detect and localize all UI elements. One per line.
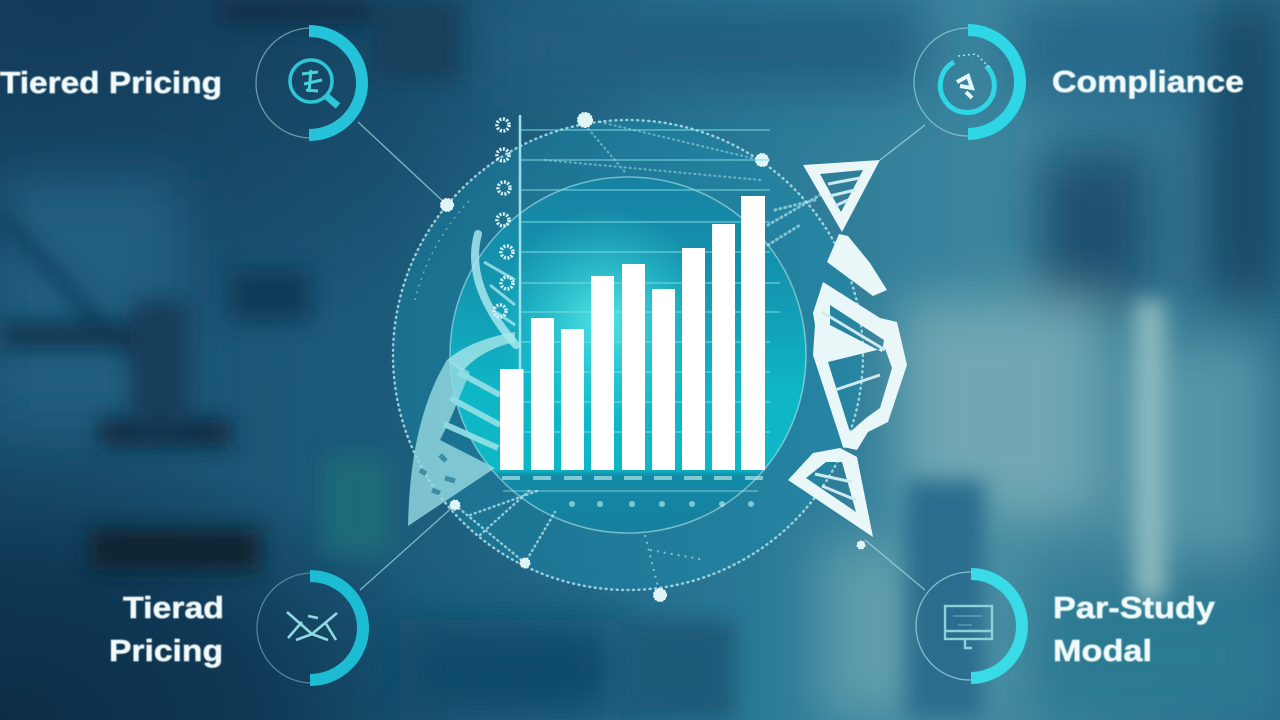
DNA helix: right xyxy=(788,160,907,537)
y-axis node glyphs xyxy=(494,119,513,317)
label: Tiered Pricing xyxy=(0,65,222,100)
label xyxy=(1053,590,1216,668)
connector lines xyxy=(358,122,925,590)
label: Par-Study xyxy=(1053,590,1216,625)
network nodes xyxy=(440,112,865,602)
label: Compliance xyxy=(1052,64,1244,99)
circular network rings xyxy=(393,120,863,595)
chart bars xyxy=(500,196,765,470)
callout: Tierad Pricing bottom left xyxy=(109,573,367,683)
label: Pricing xyxy=(109,633,223,668)
callout: Par-Study Modal bottom right xyxy=(916,572,1216,680)
icon: magnifier xyxy=(290,60,338,106)
progress ring xyxy=(256,28,366,138)
label: Modal xyxy=(1053,633,1152,668)
icon: globe ring xyxy=(940,54,994,112)
bar chart xyxy=(500,115,780,507)
icon: network mesh xyxy=(287,612,337,640)
DNA helix: left xyxy=(408,234,516,526)
icon: monitor xyxy=(945,606,992,648)
chart axis labels xyxy=(502,476,763,507)
callout: Compliance top right xyxy=(914,28,1244,136)
label: Tierad xyxy=(123,590,224,625)
chart grid xyxy=(520,115,780,470)
progress ring xyxy=(257,573,367,683)
progress ring xyxy=(914,28,1022,136)
outer tinted disc xyxy=(393,120,863,590)
progress ring xyxy=(916,572,1024,680)
callout: Tiered Pricing top left xyxy=(0,28,366,138)
central glow disc xyxy=(450,177,806,533)
label xyxy=(109,590,224,668)
